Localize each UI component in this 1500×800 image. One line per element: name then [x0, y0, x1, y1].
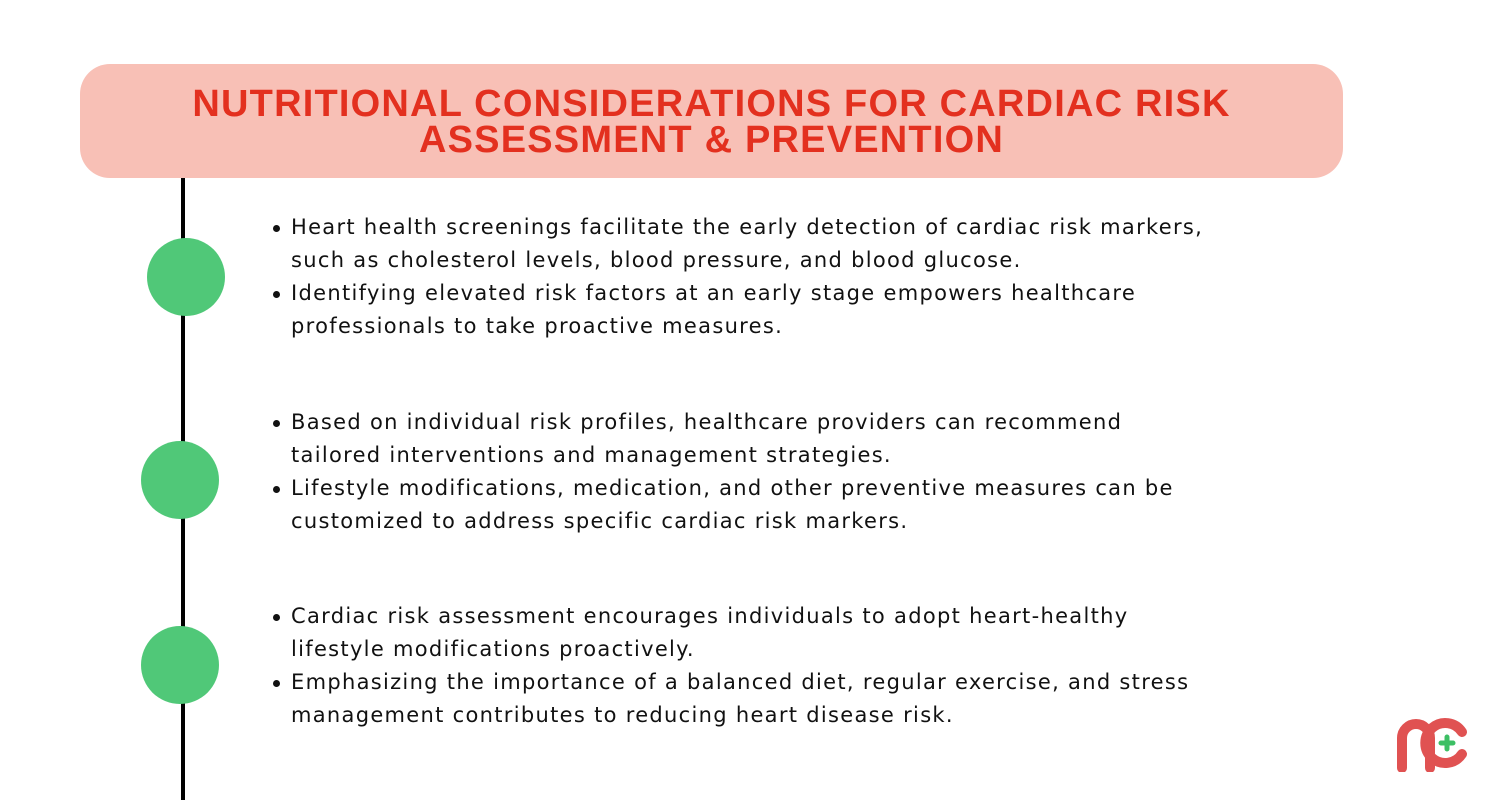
text block 2 — [273, 410, 1174, 533]
title — [192, 83, 1231, 161]
text block 1 — [273, 215, 1203, 338]
text block 1: Identifying elevated risk factors at an early stage empowers healthcare — [291, 281, 1136, 305]
text block 3: management contributes to reducing heart disease risk. — [291, 703, 954, 727]
text block 2: Based on individual risk profiles, healthcare providers can recommend — [291, 410, 1122, 434]
text block 2: customized to address specific cardiac risk markers. — [291, 509, 908, 533]
title: NUTRITIONAL CONSIDERATIONS FOR CARDIAC RISK — [192, 83, 1231, 125]
text block 3: Emphasizing the importance of a balanced diet, regular exercise, and stress — [291, 670, 1189, 694]
timeline dot 1 — [147, 238, 225, 316]
text block 2: Lifestyle modifications, medication, and other preventive measures can be — [291, 476, 1174, 500]
logo — [1397, 718, 1467, 772]
timeline line — [181, 178, 185, 800]
text block 3 — [273, 604, 1189, 727]
text block 1: Heart health screenings facilitate the early detection of cardiac risk markers, — [291, 215, 1203, 239]
timeline dot 2 — [141, 441, 219, 519]
title: ASSESSMENT & PREVENTION — [419, 119, 1004, 161]
text block 1: such as cholesterol levels, blood pressure, and blood glucose. — [291, 248, 1022, 272]
title banner — [80, 64, 1343, 178]
text block 2: tailored interventions and management strategies. — [291, 443, 892, 467]
timeline dot 3 — [141, 626, 219, 704]
text block 3: lifestyle modifications proactively. — [291, 637, 695, 661]
text block 1: professionals to take proactive measures. — [291, 314, 783, 338]
text block 3: Cardiac risk assessment encourages individuals to adopt heart-healthy — [291, 604, 1128, 628]
